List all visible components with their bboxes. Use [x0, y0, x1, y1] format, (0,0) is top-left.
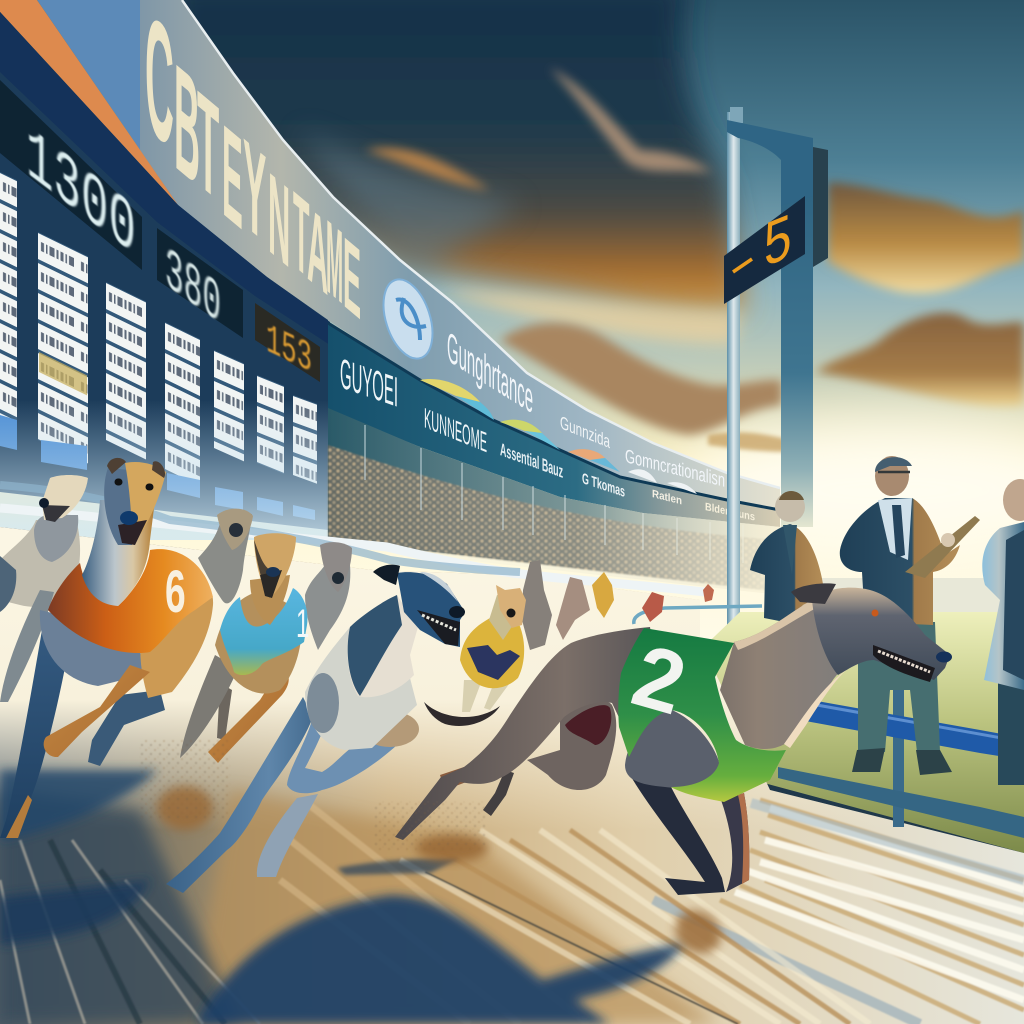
- far dog: yellow: [592, 572, 614, 618]
- coloured swooshes: [420, 379, 697, 494]
- thin pole: [727, 112, 740, 642]
- head: [496, 585, 526, 628]
- eyes: [118, 482, 150, 487]
- rear leg: [217, 683, 232, 740]
- sign: Ratlen: Ratlen: [652, 488, 682, 507]
- sign: Gunnzida: Gunnzida: [560, 412, 610, 452]
- dog: cream head left: [0, 475, 88, 702]
- sky background: [0, 0, 1024, 640]
- far dog: grey: [522, 560, 552, 650]
- sponsor band: [328, 323, 780, 527]
- crowd: [328, 445, 780, 592]
- eye: [872, 610, 878, 616]
- face: [320, 542, 352, 592]
- head: [397, 572, 465, 647]
- digital display: 5: [764, 201, 792, 281]
- front dark leg: [0, 630, 70, 838]
- left flank: [0, 556, 16, 612]
- grandstand: lower sponsor band and seating: GUYOEI: [340, 350, 398, 417]
- shadow: lower left band: [0, 880, 150, 945]
- nose: [936, 652, 952, 662]
- mouth: [417, 610, 460, 646]
- neck: [34, 514, 78, 562]
- rump: [140, 576, 213, 698]
- official: centre with clipboard: [840, 456, 980, 775]
- sign: Tkomas: G Tkomas: [582, 470, 625, 501]
- shadow: big lead shadow: [196, 895, 686, 1024]
- dog: grey behind two: [305, 542, 352, 650]
- dog: yellow jacket: [460, 585, 526, 712]
- cloud: low streaks: [708, 432, 790, 452]
- ears: [107, 458, 165, 478]
- results panel 7: [293, 395, 317, 484]
- rim: [0, 12, 330, 345]
- head: [812, 588, 950, 680]
- nose: [120, 511, 138, 525]
- neck: [82, 500, 155, 606]
- legs: [998, 670, 1024, 785]
- grey belly: [40, 610, 155, 686]
- race number: 2: [623, 626, 696, 734]
- banner: upper curved sign: Gunghrtance: [447, 322, 533, 423]
- hip oval: [625, 710, 720, 788]
- shadow: dust strip: [337, 858, 460, 875]
- officials: [750, 456, 1024, 785]
- face: [217, 509, 253, 550]
- sign: Blder: Blder Guns: [705, 501, 755, 524]
- muzzle: [42, 505, 70, 522]
- led display 3: 153: [266, 316, 312, 385]
- banner lettering: B: [174, 30, 200, 220]
- head: [875, 456, 909, 496]
- pale fence: [815, 578, 1024, 612]
- middle tan streaks: [400, 830, 870, 1024]
- main column: [781, 142, 813, 527]
- tan belly: [361, 711, 419, 747]
- blue side panel: [37, 0, 178, 205]
- timing post: [724, 107, 828, 642]
- far fore leg: [88, 690, 165, 766]
- left steep streaks: [0, 840, 260, 1024]
- rail highlight: [800, 702, 1024, 742]
- red cavity: [565, 705, 611, 745]
- neck: [250, 575, 290, 625]
- wall base haze: [0, 400, 330, 540]
- cloud: right lower: [815, 313, 1024, 406]
- head: [42, 475, 88, 520]
- nose: [449, 606, 465, 618]
- rear front leg: [721, 793, 749, 892]
- distant dogs: [522, 560, 714, 650]
- background dogs: [0, 475, 526, 712]
- hind leg: [527, 701, 616, 790]
- nose: [39, 498, 49, 508]
- dog: blue-grey with white jacket: [166, 565, 465, 893]
- dust clouds: [140, 740, 729, 962]
- muzzle: [229, 523, 243, 537]
- track shadows: [0, 770, 686, 1024]
- mouth: [873, 645, 935, 682]
- grandstand: lower sponsor band and seating: Assential Bauz: [500, 439, 563, 482]
- official: left: [750, 491, 824, 625]
- cloud: orange wisp: [365, 148, 490, 190]
- cloud: blue-grey veil under the dark cloud: [300, 130, 520, 280]
- head tan half: [125, 462, 166, 545]
- muzzle: [260, 570, 282, 598]
- body: [215, 590, 302, 694]
- nose: [506, 608, 516, 618]
- paw highlight: [6, 795, 32, 838]
- dust: right: [667, 902, 729, 962]
- rear front leg orange edge: [738, 793, 749, 884]
- far dog: small red: [703, 584, 714, 602]
- track: motion lanes: [0, 800, 1024, 1024]
- ear: [373, 565, 400, 585]
- dark face sides: [254, 540, 270, 598]
- shirt and tie: [783, 525, 797, 575]
- head: [1003, 479, 1024, 521]
- results panel 3: [106, 282, 146, 460]
- bent leg: [287, 717, 412, 793]
- glasses: [878, 471, 910, 473]
- upper blue rail: [800, 698, 1024, 760]
- orange corner panel: [0, 0, 178, 205]
- official: right: [982, 479, 1024, 785]
- led display 2: 380: [165, 237, 221, 341]
- body jacket: [460, 618, 524, 688]
- field: grass and far fence: [690, 578, 1024, 853]
- cloud: lit ridge: [550, 68, 712, 172]
- dog tail: [424, 702, 500, 726]
- banner lettering: T: [197, 62, 219, 231]
- teeth: [422, 615, 456, 630]
- head: [254, 533, 296, 598]
- jacket: [305, 627, 417, 750]
- clouds: [170, 0, 1024, 452]
- jacket number: 1: [296, 601, 309, 645]
- banner lettering: M: [326, 197, 343, 326]
- neck and chest: [720, 600, 858, 749]
- tie: [892, 505, 905, 558]
- navy panel: [467, 645, 520, 680]
- blue panel footers: [0, 415, 315, 520]
- jacket: [840, 498, 960, 625]
- sign: Gomncrationalisn: Gomncrationalisn: [625, 446, 725, 492]
- neck white: [348, 595, 418, 697]
- orange leg stub: [440, 765, 485, 790]
- gold highlighted row: [39, 352, 87, 395]
- dog: tan with blue jacket: [180, 533, 309, 763]
- banner lettering: E: [343, 214, 361, 341]
- dust: left: [157, 786, 213, 830]
- window frames: [365, 425, 743, 563]
- nose: [266, 567, 280, 577]
- digital display: [724, 196, 805, 304]
- shadow: left band: [0, 770, 157, 840]
- far curved rail: [634, 606, 762, 624]
- muzzle: [332, 572, 344, 584]
- shoes: [852, 748, 952, 775]
- post side plate: [813, 147, 828, 267]
- grandstand: scoreboard wall: [0, 12, 330, 540]
- track dark lower-left zone: [0, 790, 240, 1024]
- results panel 6: [257, 375, 284, 474]
- track bright upper fade: [0, 527, 1024, 900]
- post top arm: [727, 120, 813, 206]
- neck: [489, 595, 520, 640]
- results panel 4: [165, 322, 200, 489]
- far side rail and fence: [0, 485, 705, 592]
- dust: left speckle: [140, 740, 230, 820]
- banner lettering: A: [307, 182, 328, 318]
- banner: upper curved sign: [0, 0, 780, 512]
- hand: [941, 533, 955, 547]
- led display 2: [157, 228, 243, 341]
- banner white edge: [182, 0, 780, 488]
- horizon glow: [670, 420, 1024, 560]
- results panel 5: [214, 350, 244, 461]
- dust: middle: [416, 834, 488, 862]
- cloud: tan haze below dark cloud: [440, 290, 740, 345]
- dog: orange jacket: [0, 458, 213, 838]
- led display 1: [0, 80, 142, 277]
- trousers: [858, 622, 940, 752]
- tan leg: [208, 665, 289, 763]
- cloud: right upper: [828, 182, 1024, 293]
- tan fore leg: [44, 665, 150, 757]
- banner lettering: E: [222, 97, 243, 259]
- hair: [875, 457, 912, 472]
- dark front: [1003, 530, 1024, 680]
- grey front leg: [180, 655, 238, 758]
- head: [775, 492, 805, 522]
- body: [0, 520, 80, 607]
- right light streaks: [720, 800, 1024, 1024]
- hind leg: [0, 590, 54, 702]
- back leg: [257, 794, 318, 877]
- muzzle: [118, 520, 147, 545]
- band edge: [328, 323, 780, 510]
- neck dark: [348, 595, 402, 696]
- orange jacket: [48, 549, 213, 653]
- led display 1: 1300: [26, 113, 136, 277]
- results panel 1: [0, 172, 17, 424]
- jacket number: 6: [165, 558, 186, 625]
- throat highlight: [784, 663, 858, 748]
- neck highlight: [734, 600, 818, 650]
- track tan mid-zone: [190, 790, 720, 1024]
- dog: grey behind one: [198, 509, 253, 603]
- banner lettering: Y: [243, 111, 266, 270]
- cloud: large dark storm cloud: [170, 0, 745, 312]
- hair: [779, 491, 804, 500]
- jacket: [220, 588, 307, 675]
- pole cap: [730, 107, 743, 123]
- lower rail: [778, 767, 1024, 838]
- logo: [374, 273, 442, 365]
- head grey half: [104, 468, 132, 545]
- back and rear: [395, 627, 660, 840]
- grandstand: lower sponsor band and seating: [328, 323, 780, 595]
- jacket: [982, 522, 1024, 690]
- grandstand: lower sponsor band and seating: KUNNEOME: [424, 403, 487, 459]
- shirt: [878, 498, 912, 560]
- banner lettering: T: [293, 168, 309, 303]
- glass front: [328, 408, 780, 590]
- cloud: centre brown: [500, 323, 782, 435]
- ear: [791, 583, 836, 604]
- teeth: [878, 651, 930, 672]
- far dog: red: [642, 592, 664, 622]
- banner lettering: [145, 0, 361, 341]
- green jacket: [618, 628, 786, 802]
- long fore leg: [166, 697, 313, 893]
- clipboard: [905, 516, 980, 578]
- results panel 2: [38, 232, 88, 464]
- dog: lead, green jacket 2: [395, 583, 952, 895]
- near rail: [634, 606, 1024, 838]
- stand haze: [328, 408, 780, 595]
- banner lettering: N: [268, 149, 290, 294]
- far dog: pale brown: [556, 577, 590, 640]
- jacket: [750, 524, 824, 625]
- dust: middle speckle: [375, 800, 485, 850]
- legs: [462, 680, 512, 712]
- front dark leg: [627, 770, 725, 895]
- track surface: [0, 527, 1024, 1024]
- rail post: [893, 690, 904, 827]
- hind oval: [307, 673, 339, 733]
- small rear foot: [483, 770, 514, 816]
- pale head edge: [420, 572, 458, 602]
- led display 3: [255, 303, 320, 385]
